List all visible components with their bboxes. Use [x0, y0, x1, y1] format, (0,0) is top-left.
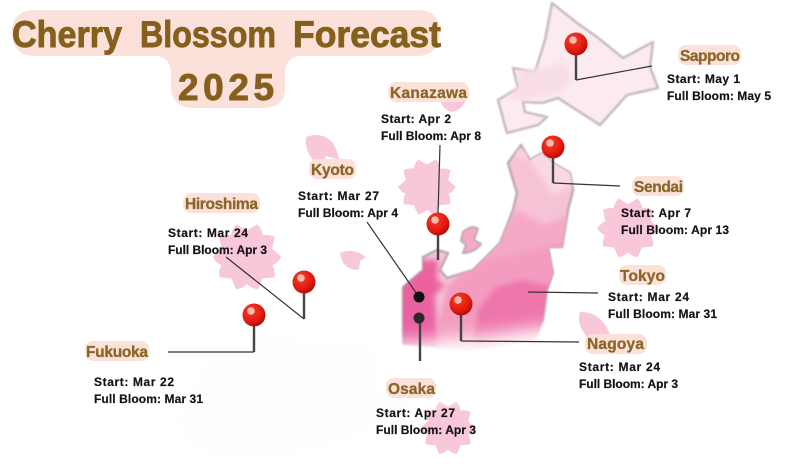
Hiroshima callout: Start: Mar 24: [168, 226, 248, 240]
map of Japan: [395, 3, 658, 360]
Nagoya marker: [450, 292, 579, 342]
Kanazawa callout: Kanazawa: [390, 85, 467, 102]
Osaka callout: Start: Apr 27: [376, 406, 455, 420]
Nagoya callout: [579, 334, 678, 391]
Hokkaido: [498, 3, 658, 133]
Kyoto callout: Full Bloom: Apr 4: [298, 206, 398, 220]
title line one: Forecast: [293, 14, 441, 55]
petal near Kanazawa label: [440, 100, 466, 112]
Sapporo marker: [564, 32, 652, 80]
fade over southern coast: [375, 326, 610, 395]
Nagoya callout: Nagoya: [587, 336, 644, 353]
Fukuoka callout: Fukuoka: [86, 344, 148, 361]
title year: 2025: [178, 67, 279, 108]
Osaka callout: Osaka: [388, 381, 435, 398]
Hiroshima callout: [168, 193, 267, 257]
petal near Kyoto: [306, 135, 339, 166]
Nagoya callout: Start: Mar 24: [579, 360, 660, 374]
Fukuoka marker: [168, 304, 266, 352]
Tokyo callout: Tokyo: [620, 268, 665, 285]
Fukuoka callout: Full Bloom: Mar 31: [94, 392, 203, 406]
Kyoto callout: Start: Mar 27: [298, 189, 379, 203]
Osaka callout: [376, 378, 476, 437]
Kanazawa marker: [426, 145, 450, 260]
Kyoto marker: [367, 222, 424, 302]
Sapporo callout: Start: May 1: [667, 72, 740, 86]
blossom near Kanazawa: [397, 159, 457, 217]
Fukuoka callout: Start: Mar 22: [94, 375, 174, 389]
petal near Nagoya: [579, 312, 612, 338]
Fukuoka callout: [85, 341, 203, 406]
Osaka callout: Full Bloom: Apr 3: [376, 423, 476, 437]
Kanazawa callout: Full Bloom: Apr 8: [381, 129, 481, 143]
Sendai callout: Start: Apr 7: [621, 206, 691, 220]
title line one: Cherry: [12, 14, 122, 55]
Kyoto callout: [298, 159, 398, 220]
Sendai marker: [542, 136, 620, 186]
blossom near Hiroshima: [211, 224, 283, 293]
petal near Hiroshima: [340, 251, 366, 270]
Kanazawa callout: [381, 82, 481, 143]
faint southern map remnant: [170, 333, 420, 463]
Honshu: [400, 143, 575, 350]
Sapporo callout: [667, 45, 771, 103]
Sendai callout: Full Bloom: Apr 13: [621, 223, 729, 237]
Tokyo leader line: [528, 292, 598, 293]
Osaka marker: [414, 312, 424, 361]
Tokyo callout: Full Bloom: Mar 31: [608, 307, 717, 321]
Tokyo callout: [608, 265, 717, 321]
Hiroshima callout: Full Bloom: Apr 3: [168, 243, 267, 257]
Kyoto callout: Kyoto: [311, 162, 354, 179]
Sapporo callout: Sapporo: [680, 48, 740, 65]
title line one: Blossom: [140, 14, 276, 55]
Tokyo callout: Start: Mar 24: [608, 290, 689, 304]
Nagoya callout: Full Bloom: Apr 3: [579, 377, 678, 391]
Kanazawa callout: Start: Apr 2: [381, 112, 451, 126]
blossom near Osaka: [419, 402, 477, 457]
title line one: [12, 14, 441, 55]
Sendai callout: Sendai: [634, 179, 683, 196]
Sendai callout: [621, 176, 729, 237]
Sapporo callout: Full Bloom: May 5: [667, 89, 771, 103]
Hiroshima callout: Hiroshima: [185, 196, 258, 213]
Hiroshima marker: [226, 257, 316, 319]
title banner: [12, 10, 441, 108]
Sado island: [461, 227, 481, 253]
blossom near Sendai: [596, 199, 660, 260]
